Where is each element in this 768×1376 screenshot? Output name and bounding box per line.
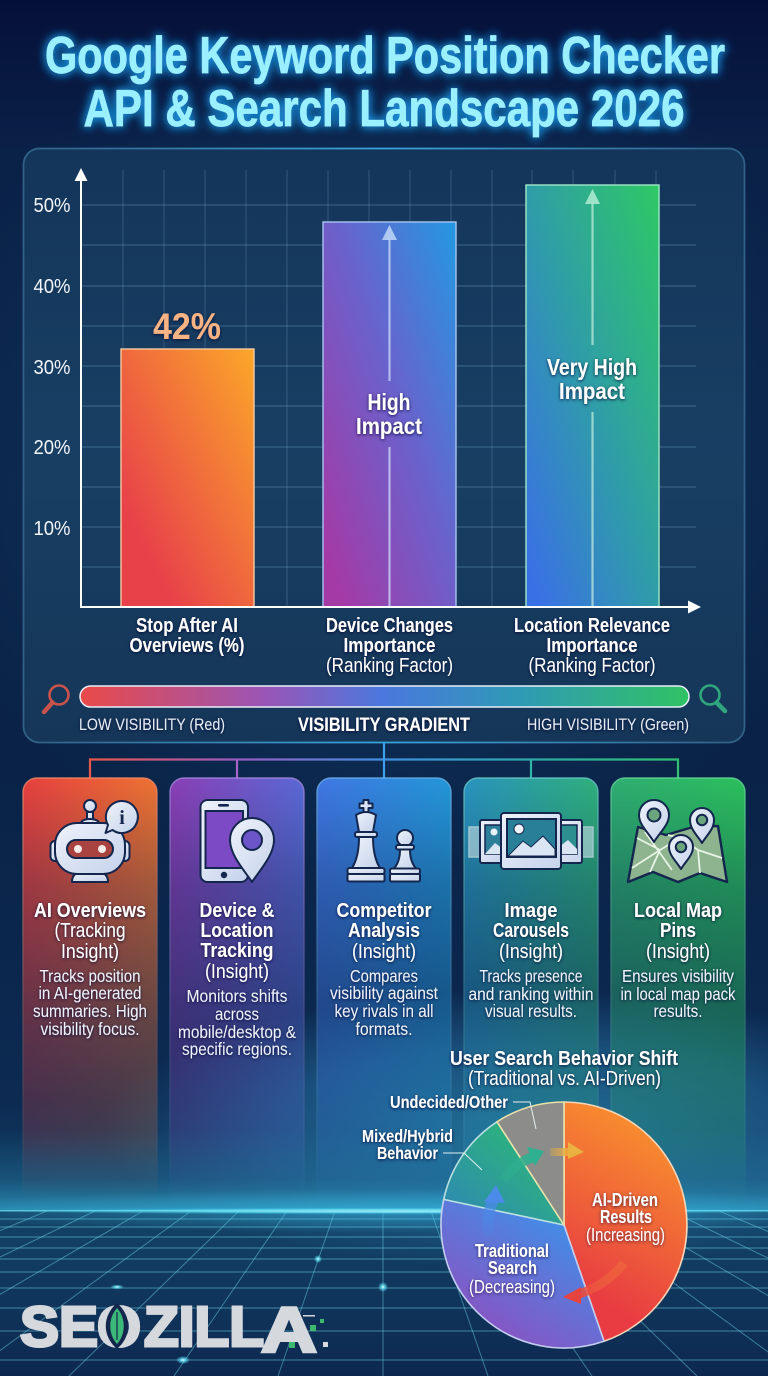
x axis labels [130,615,670,677]
x axis labels: Location Relevance [514,615,670,637]
gradient legend labels: HIGH VISIBILITY (Green) [527,715,689,734]
card 2 text: Device & [200,899,275,922]
card 2 text: Monitors shifts [186,986,288,1006]
card fills [22,777,746,1186]
horizon glow [0,1189,768,1233]
card 5 text: Ensures visibility [622,966,734,986]
logo: SEOZILLA [20,1294,328,1366]
card 1 text: (Tracking [54,920,126,942]
icon: image carousel frames [469,813,593,869]
card 3 text [330,899,438,1039]
haze above the horizon [0,1130,768,1211]
card 5 text: in local map pack [620,984,736,1004]
icon: folded map with three pins [628,800,727,882]
label: very high impact: Impact [559,378,625,404]
slice label: AI-driven results: Results [600,1207,652,1227]
slice label: undecided/other [390,1092,536,1129]
chart axes [74,168,701,614]
card: image carousels [468,813,594,1021]
icon: chess king and pawn [348,800,420,882]
icon: red magnifier [44,686,68,712]
card 1 text: AI Overviews [34,899,146,922]
x axis labels: Stop After AI [136,615,238,637]
slice label: AI-driven results: (Increasing) [586,1225,665,1245]
value label 42%: 42% [153,306,221,347]
card 1 text: Insight) [61,941,119,963]
y axis labels: 20% [34,437,71,459]
card 3 text: key rivals in all [334,1001,434,1021]
x axis labels: Importance [344,635,436,657]
card 3 text: Compares [350,966,418,986]
y axis labels: 50% [34,195,71,217]
pie heading: (Traditional vs. AI-Driven) [468,1067,661,1090]
label: very high impact [547,354,637,404]
icon: robot with info bubble: i [119,807,125,829]
y axis labels: 40% [34,276,71,298]
logo: SEOZILLA: ZILL [144,1295,264,1359]
x axis labels: Device Changes [326,615,453,637]
card 1 text: visibility focus. [40,1019,140,1039]
slice label: traditional search: Traditional [475,1241,549,1261]
card 1 text: in AI-generated [38,983,142,1003]
card 2 text: Location [200,919,274,942]
slice label: AI-driven results: AI-Driven [592,1190,658,1210]
card 2 text: across [215,1004,259,1024]
card 5 text: Local Map [634,899,722,922]
y axis labels: 30% [34,357,71,379]
card: competitor analysis [330,800,438,1039]
label: very high impact: Very High [547,354,637,380]
card 3 text: Competitor [336,899,432,922]
pie slices [441,1102,687,1348]
panel: bar chart and visibility gradient [24,148,744,742]
card 4 text: and ranking within [468,984,594,1004]
chart grid [82,170,696,606]
pie heading [450,1047,678,1090]
slice label: traditional search [469,1241,555,1297]
slice label: mixed/hybrid behavior: Behavior [377,1143,438,1163]
card 2 text: specific regions. [182,1039,292,1059]
card 4 text [468,899,594,1021]
card 5 text: results. [654,1001,702,1021]
title [45,27,725,138]
x axis labels: (Ranking Factor) [528,655,656,677]
card 2 text: Tracking [200,939,274,962]
card 3 text: Analysis [348,919,420,942]
card: device and location tracking [178,800,296,1059]
pie heading: User Search Behavior Shift [450,1047,678,1070]
logo: SEOZILLA: A [261,1294,317,1366]
bar: device changes importance [323,222,456,607]
icon: robot with info bubble [50,800,138,882]
card 5 text: (Insight) [646,941,710,963]
card 1 text: summaries. High [33,1001,147,1021]
icon: phone with location pin [200,800,274,882]
card 3 text: (Insight) [352,941,416,963]
x axis labels: (Ranking Factor) [326,655,453,677]
logo: SEOZILLA: SE [20,1295,98,1359]
visibility gradient bar [80,686,689,707]
gradient legend labels: LOW VISIBILITY (Red) [79,715,225,734]
x axis labels: Overviews (%) [130,635,244,657]
card 1 text [33,899,147,1039]
card 3 text: formats. [356,1019,412,1039]
card 2 text [178,899,296,1059]
slice label: undecided/other: Undecided/Other [390,1092,508,1112]
card: local map pins [620,800,736,1021]
perspective floor grid [0,1211,768,1376]
card 4 text: Carousels [493,919,569,942]
y axis labels: 10% [34,518,71,540]
connector tree [90,743,678,778]
card 4 text: visual results. [485,1001,577,1021]
card 5 text [620,899,736,1021]
bar: location relevance importance [526,185,659,607]
y axis labels [34,195,71,540]
slice label: traditional search: Search [488,1258,537,1278]
slice label: traditional search: (Decreasing) [469,1277,555,1297]
card 2 text: mobile/desktop & [178,1022,296,1042]
card 4 text: Tracks presence [480,966,582,986]
label: high impact: High [368,389,410,415]
card 4 text: Image [504,899,558,922]
card 5 text: Pins [660,919,696,942]
slice label: AI-driven results [586,1190,665,1245]
x axis labels: Importance [546,635,638,657]
slice label: mixed/hybrid behavior: Mixed/Hybrid [362,1126,453,1146]
card 4 text: (Insight) [499,941,563,963]
gradient legend labels: VISIBILITY GRADIENT [298,715,470,736]
bar: stop after AI overviews [121,306,254,607]
logo: SEOZILLA: O [97,1295,141,1359]
icon: green magnifier [700,686,725,711]
card 1 text: Tracks position [40,966,140,986]
card: AI overviews [33,800,147,1039]
pie chart section: user search behavior shift [362,1047,687,1348]
gradient legend labels [79,715,689,736]
slice label: mixed/hybrid behavior [362,1126,482,1170]
card 3 text: visibility against [330,983,438,1003]
label: high impact: Impact [356,413,422,439]
curved flow arrows [484,1142,624,1304]
card 2 text: (Insight) [205,961,269,983]
label: high impact [356,389,422,439]
